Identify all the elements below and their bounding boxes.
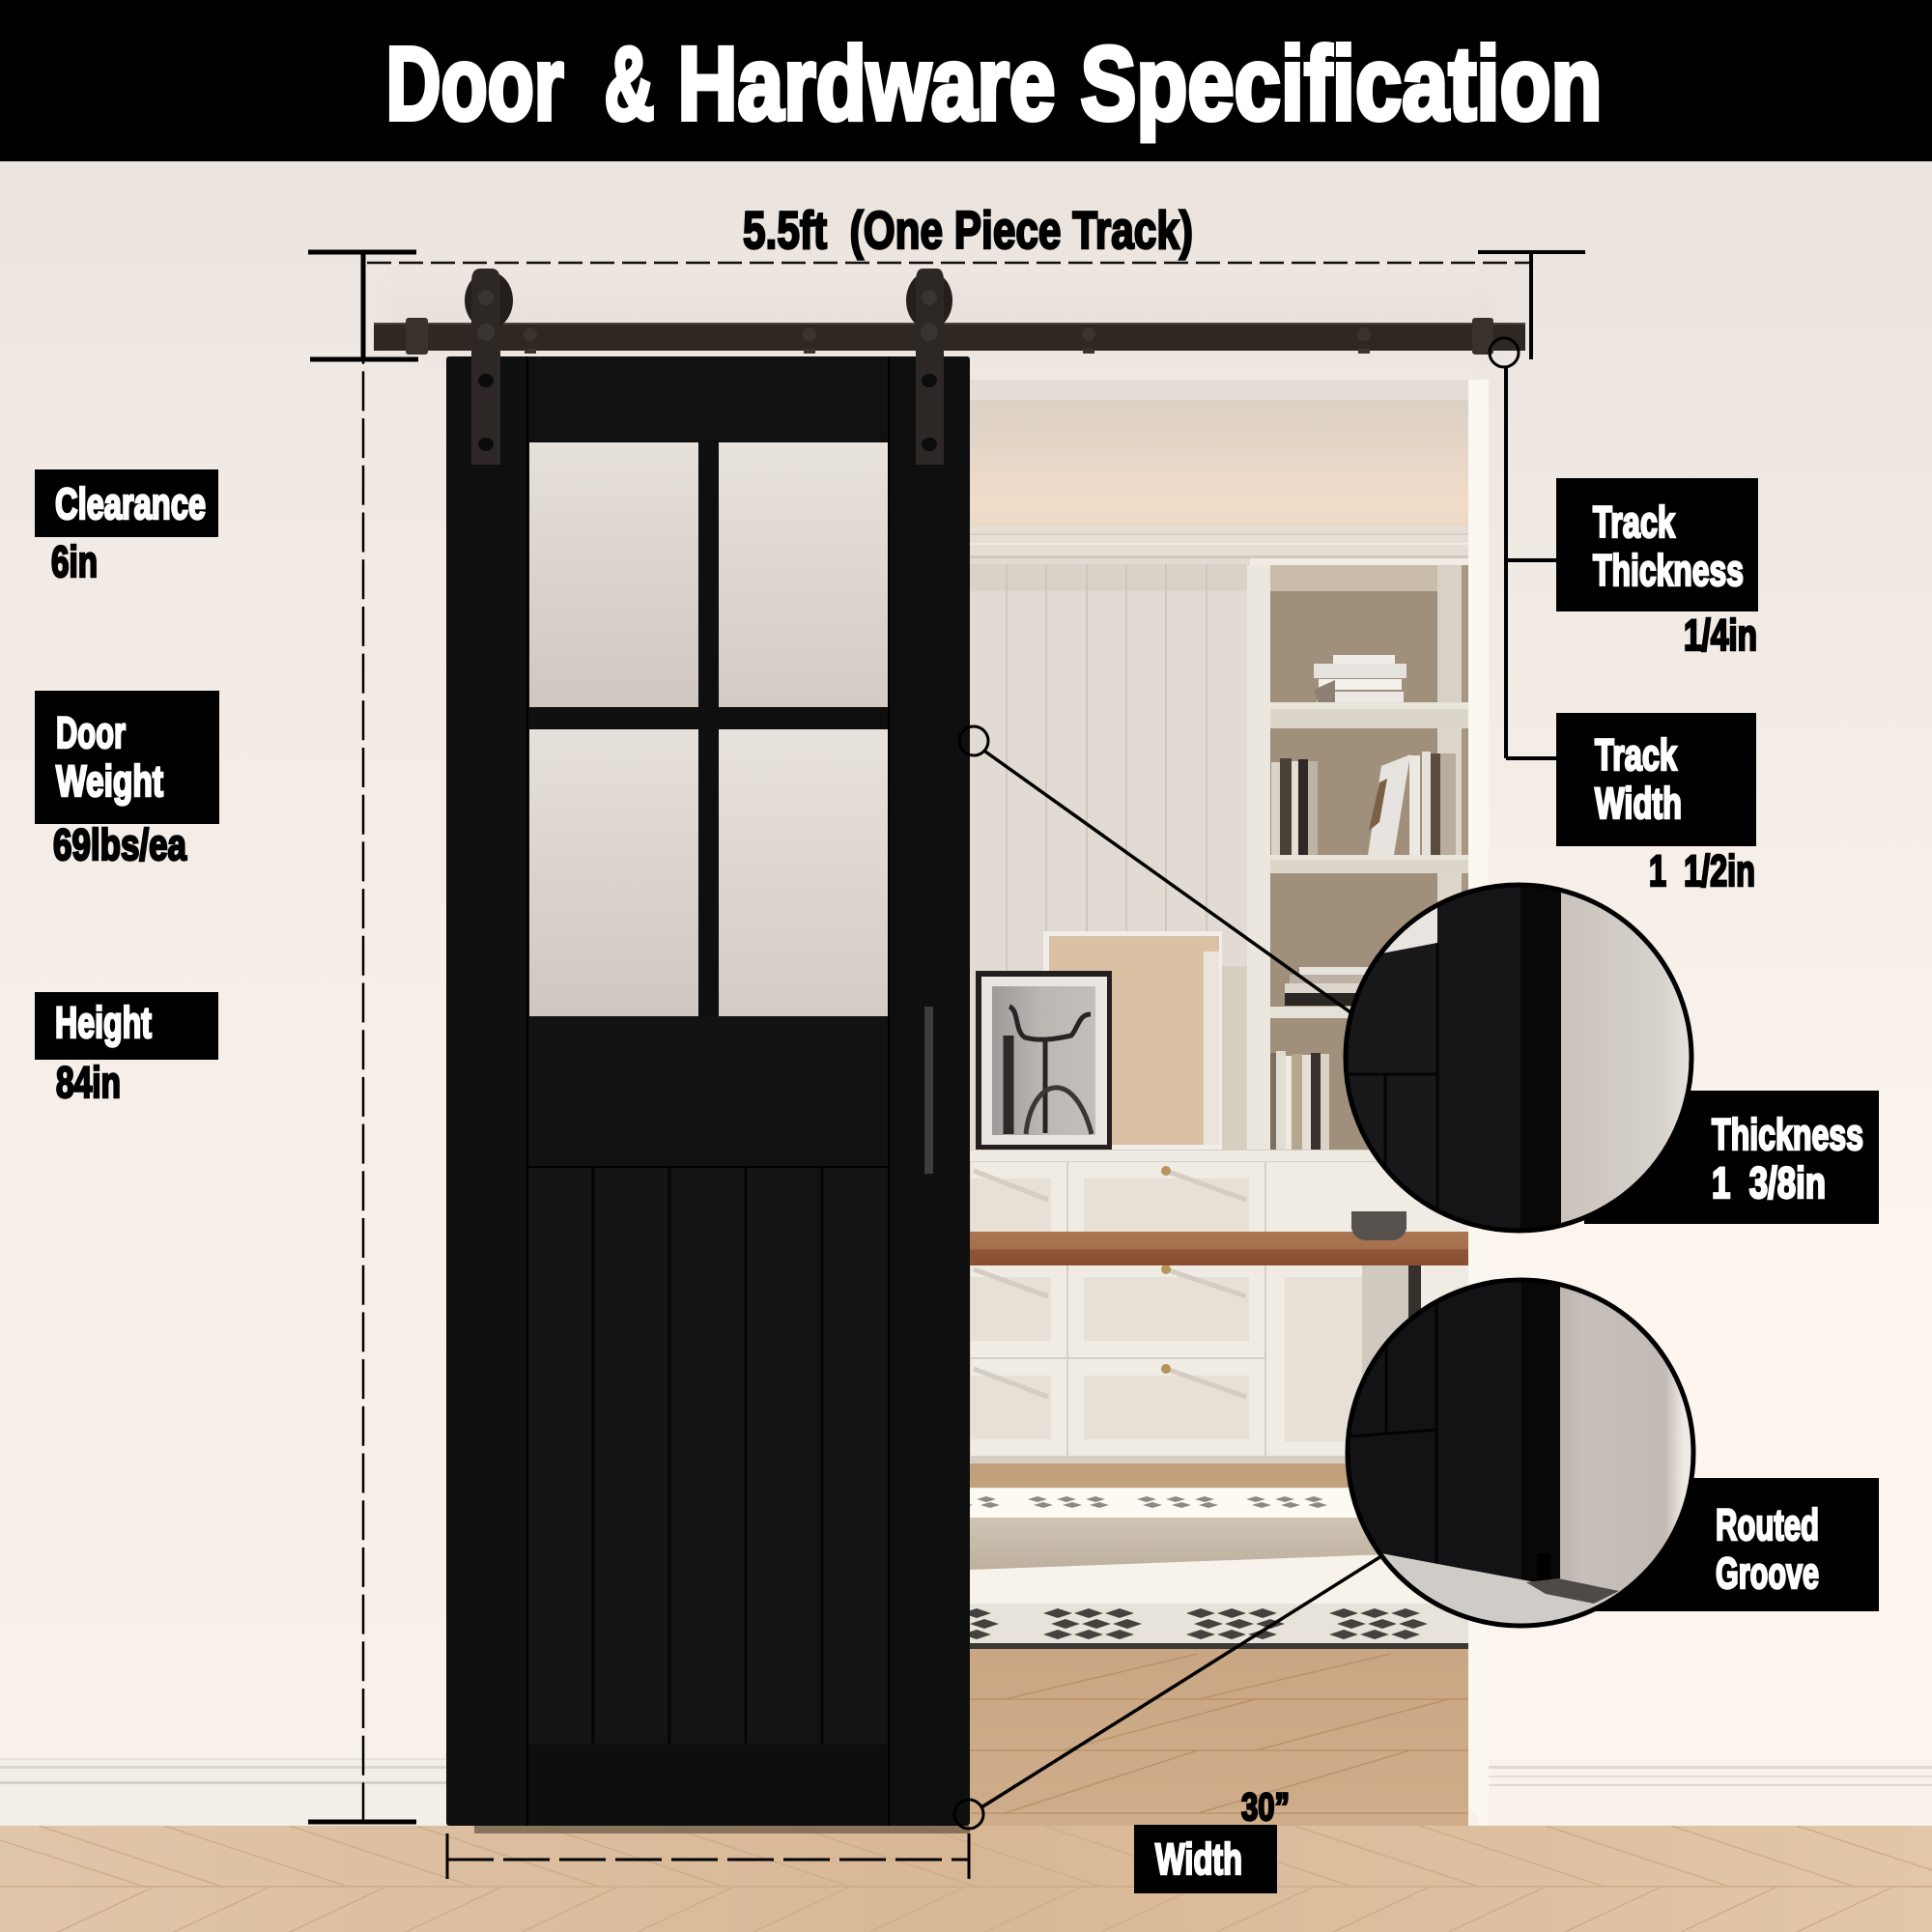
glass top right <box>719 442 889 707</box>
routed groove label box <box>1584 1478 1879 1611</box>
mug <box>1351 1211 1406 1240</box>
right hanger <box>906 269 952 465</box>
door weight label: Weight <box>56 756 163 806</box>
track length dimension <box>367 200 1585 359</box>
glass bottom right <box>719 729 889 1016</box>
books, bottom shelf <box>1270 1051 1329 1150</box>
baseboard left <box>0 1758 446 1826</box>
thickness label text: Thickness <box>1712 1110 1863 1159</box>
glass bottom left <box>529 729 698 1016</box>
routed groove label text: Routed <box>1716 1500 1819 1549</box>
track callout leader <box>1490 338 1557 758</box>
track thickness label: Thickness <box>1593 546 1744 595</box>
interior floor <box>970 1463 1468 1826</box>
beige art print <box>1043 931 1222 1150</box>
track thickness value: 1/4in <box>1684 611 1757 660</box>
track width label <box>1556 713 1756 895</box>
ceiling <box>970 380 1468 526</box>
panelled wall <box>970 558 1250 1157</box>
thickness label text <box>1712 1110 1863 1208</box>
header bar <box>0 0 1932 161</box>
thickness label text: 1 3/8in <box>1712 1158 1826 1208</box>
title: Hardware <box>678 25 1055 141</box>
track width label: Track <box>1595 730 1678 780</box>
height label: Height <box>55 998 152 1047</box>
herringbone interior floor lines <box>970 1654 1468 1813</box>
width label: Width <box>1155 1834 1242 1884</box>
side panel behind art <box>1222 966 1247 1150</box>
door <box>446 356 970 1826</box>
crown molding <box>970 526 1468 558</box>
track shadow <box>386 290 1497 348</box>
thickness leader <box>959 726 1350 1012</box>
clearance bracket <box>308 252 418 359</box>
clearance label: Clearance <box>55 479 206 528</box>
cabinets <box>970 1150 1468 1463</box>
routed groove label text: Groove <box>1716 1548 1819 1598</box>
width dimension <box>447 1833 969 1879</box>
bottom rail <box>527 1746 889 1826</box>
track width value: 1 1/2in <box>1649 846 1755 895</box>
title: Door <box>386 25 564 141</box>
bicycle photo frame <box>976 971 1112 1150</box>
title: & <box>605 25 655 141</box>
door weight label <box>35 691 219 869</box>
header soffit <box>970 380 1468 400</box>
plank panel <box>527 1167 889 1744</box>
height label <box>35 992 218 1107</box>
track bolts <box>524 327 1371 354</box>
track thickness label: Track <box>1593 497 1676 547</box>
baseboard right <box>1489 1760 1932 1826</box>
door weight value: 69lbs/ea <box>53 820 187 869</box>
track thickness label <box>1556 478 1758 660</box>
books, top stack <box>1314 655 1406 702</box>
height value: 84in <box>56 1058 121 1107</box>
top rail <box>527 356 889 440</box>
track width label: Width <box>1595 779 1682 828</box>
door trim right <box>1468 380 1489 1826</box>
left track stop <box>406 318 428 355</box>
magnifier: routed groove <box>1343 1275 1705 1642</box>
table top <box>970 1232 1468 1265</box>
door handle <box>924 1007 933 1174</box>
floor <box>0 1826 1932 1932</box>
lock rail <box>527 1016 889 1167</box>
track length label: 5.5ft (One Piece Track) <box>743 200 1193 260</box>
track rail <box>374 318 1525 355</box>
rug <box>970 1488 1468 1649</box>
room seen through opening <box>970 380 1468 1826</box>
left hanger <box>465 269 513 465</box>
books, third shelf stack <box>1285 967 1372 1006</box>
thickness label box <box>1584 1091 1879 1224</box>
glass top left <box>529 442 698 707</box>
clearance value: 6in <box>51 537 98 586</box>
magnifier: door thickness <box>1346 879 1706 1236</box>
door grooves <box>527 356 889 1826</box>
title <box>386 25 1602 141</box>
clearance label <box>35 469 218 586</box>
books, middle shelf <box>1271 752 1456 855</box>
height dimension <box>308 359 416 1822</box>
width label <box>1134 1825 1277 1893</box>
door weight label: Door <box>56 708 126 757</box>
routed groove leader <box>954 1556 1381 1829</box>
title: Specification <box>1080 25 1602 141</box>
routed groove label text <box>1716 1500 1819 1598</box>
bookcase <box>1247 565 1468 1156</box>
right track stop <box>1472 318 1493 355</box>
table leg <box>1408 1265 1421 1325</box>
width value: 30” <box>1241 1786 1290 1829</box>
